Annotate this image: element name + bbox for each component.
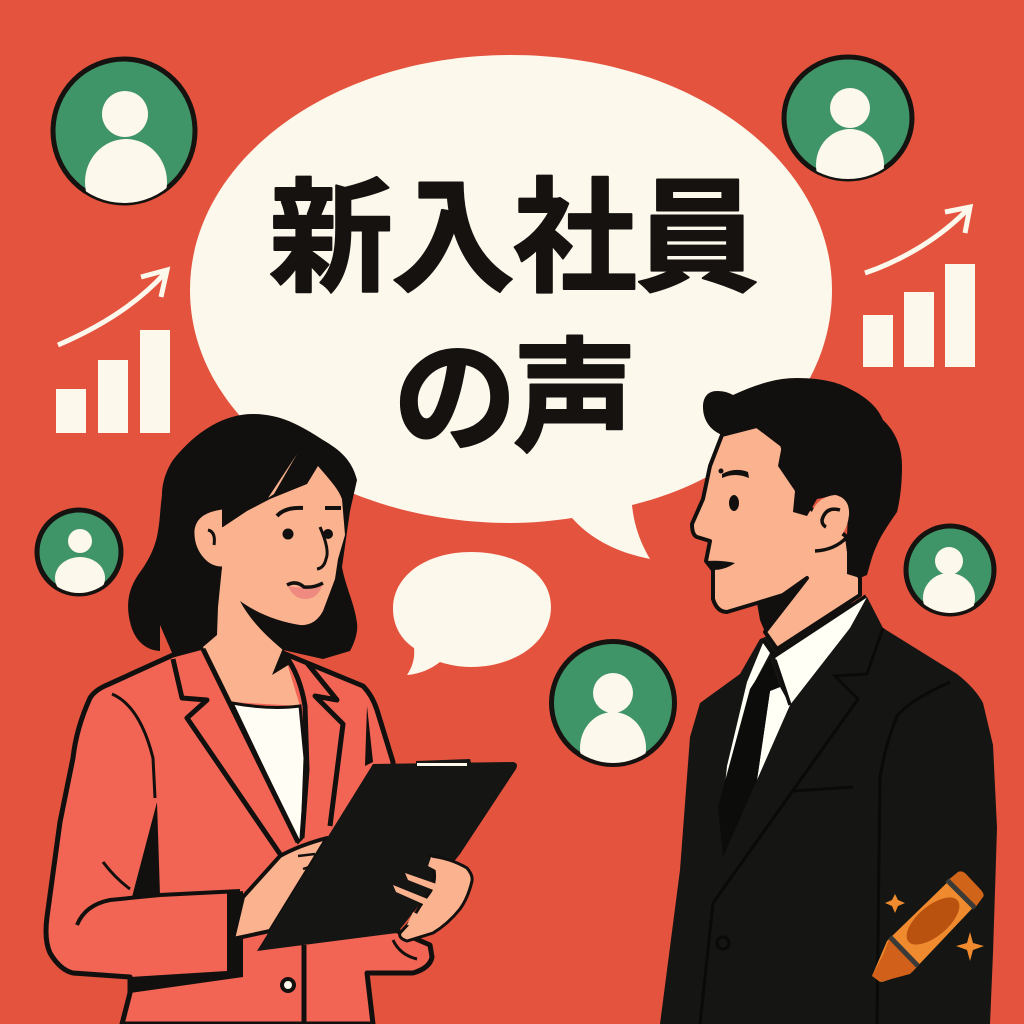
- man ear: [810, 495, 849, 551]
- woman hair highlight: [268, 454, 297, 498]
- woman blouse: [232, 703, 305, 842]
- woman: [46, 414, 517, 1024]
- man suit details: [700, 628, 950, 1024]
- title: の声: [393, 330, 637, 468]
- icon: user avatar centre: [552, 642, 674, 784]
- woman jacket shadows: [130, 706, 373, 993]
- bar chart right: [863, 207, 975, 367]
- main speech bubble: [190, 55, 832, 559]
- man: [660, 378, 997, 1024]
- icon: user avatar middle right: [906, 526, 994, 623]
- man collar line: [763, 596, 866, 705]
- woman left hand: [233, 838, 327, 939]
- small speech bubble: [393, 552, 551, 675]
- man neck and face: [692, 426, 860, 649]
- icon: crayon: [872, 871, 984, 982]
- woman hair: [128, 414, 357, 659]
- woman ear: [193, 508, 222, 568]
- woman neck and face: [203, 466, 345, 706]
- man jaw shadow: [757, 578, 807, 632]
- icon: user avatar middle left: [37, 510, 121, 599]
- man tie: [718, 658, 780, 857]
- woman button: [282, 979, 294, 991]
- bar chart left: [56, 270, 170, 433]
- title: [269, 170, 759, 468]
- man face features: [706, 468, 749, 570]
- woman lapels: [77, 649, 417, 1024]
- title: 新入社員: [269, 170, 759, 308]
- man hair: [703, 378, 902, 578]
- clipboard: [257, 759, 517, 951]
- icon: user avatar top right: [784, 57, 912, 201]
- man shirt: [723, 597, 867, 805]
- woman jacket: [46, 647, 432, 1024]
- icon: user avatar top left: [53, 59, 195, 225]
- man suit: [660, 597, 997, 1024]
- woman neck crease: [272, 648, 290, 675]
- woman face features: [277, 508, 341, 599]
- woman right hand: [393, 856, 472, 941]
